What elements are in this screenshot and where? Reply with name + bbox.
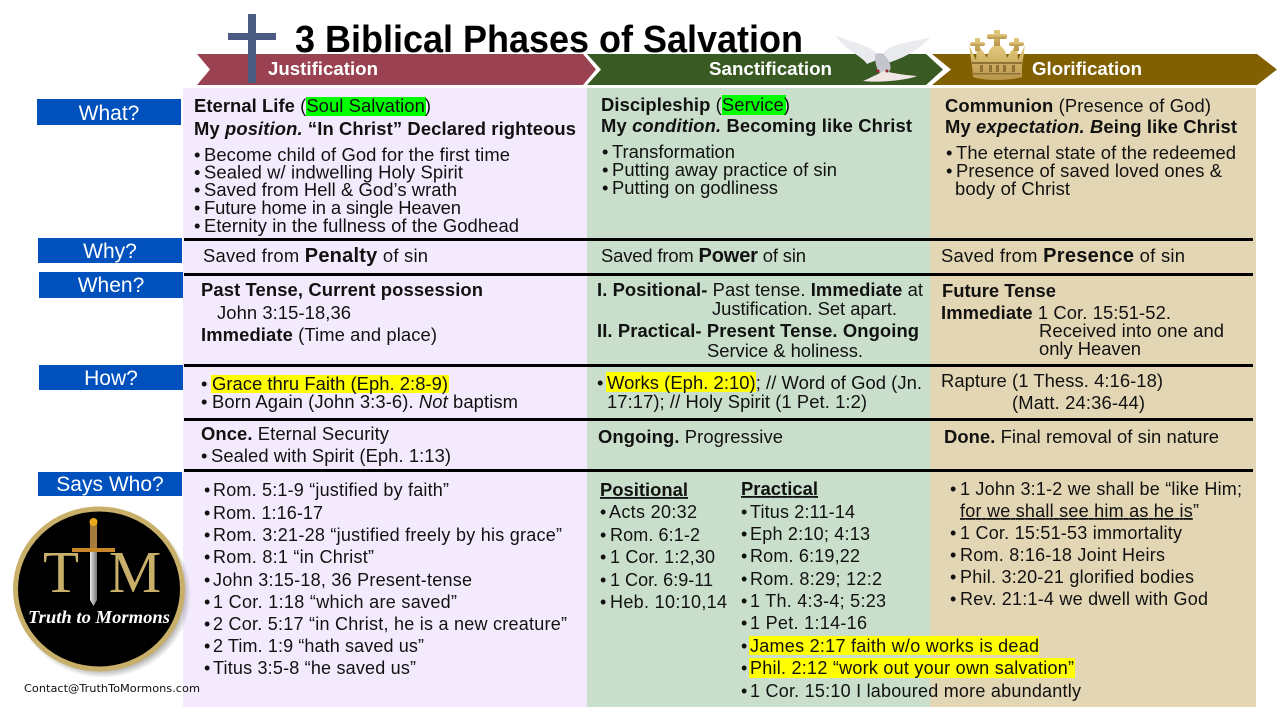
duration: justification: Sealed with Spirit (Eph. 1:13) [211,445,451,466]
when: sanctification [597,279,923,361]
what: justification: • [194,215,200,236]
what: glorification: My expectation. Being like Christ [945,116,1237,137]
how: sanctification [597,372,922,412]
what: sanctification: Discipleship (Service) [601,94,790,115]
row label: How?: How? [84,367,138,390]
phase arrow: Glorification [932,54,1277,85]
says who: practical verses: • [741,613,747,633]
column backgrounds [183,88,1256,707]
says who: justification: • [204,658,210,678]
what: sanctification: My condition. Becoming like Christ [601,115,912,136]
says who: positional verses: 1 Cor. 6:9-11 [610,570,713,590]
how: glorification: Rapture (1 Thess. 4:16-18) [941,370,1163,391]
says who: justification: Rom. 1:16-17 [213,503,323,523]
when: sanctification: Service & holiness. [707,340,863,361]
phase arrow: Sanctification: Sanctification [709,58,832,79]
what: sanctification: Transformation [612,141,735,162]
what: sanctification: Putting away practice of sin [612,159,837,180]
says who: glorification: • [950,567,956,587]
how: sanctification: Works (Eph. 2:10); // Word of God (Jn. [607,372,922,393]
duration: glorification: Done. Final removal of sin nature [944,426,1219,447]
says who: practical verses: • [741,591,747,611]
says who: justification: 2 Tim. 1:9 “hath saved us” [213,636,424,656]
says who: practical verses: • [741,546,747,566]
when: justification: Past Tense, Current possession [201,279,483,300]
why: glorification: Saved from Presence of sin [941,245,1185,267]
row label: What?: What? [79,102,139,125]
when: glorification: Immediate 1 Cor. 15:51-52. [941,302,1171,323]
what: sanctification [601,94,912,198]
says who: positional verses: Heb. 10:10,14 [610,592,727,612]
what: justification: Sealed w/ indwelling Holy Spirit [204,162,463,182]
says who: glorification: Rev. 21:1-4 we dwell with God [960,589,1208,609]
says who: glorification: • [950,479,956,499]
how: justification: Born Again (John 3:3-6). Not baptism [212,391,518,412]
what: sanctification: • [602,177,608,198]
says who: justification: Rom. 5:1-9 “justified by faith” [213,480,449,500]
says who: justification: • [204,503,210,523]
says who: justification: John 3:15-18, 36 Present-tense [213,570,472,590]
logo: Truth to Mormons [15,509,191,678]
what: glorification: • [946,160,952,181]
row label: Why? [38,238,182,263]
says who: positional verses: • [600,592,606,612]
says who: positional verses: Acts 20:32 [609,502,697,522]
says who: positional verses: • [600,570,606,590]
when: glorification: only Heaven [1039,338,1141,359]
what: justification: Become child of God for the first time [204,144,510,165]
says who: practical verses: • [741,502,747,522]
why: justification: Saved from Penalty of sin [203,245,428,267]
what: justification: Future home in a single Heaven [204,197,461,218]
how: justification: • [201,373,207,394]
what: justification: My position. “In Christ” Declared righteous [194,118,576,139]
says who: positional verses: Rom. 6:1-2 [610,525,700,545]
says who: justification: • [204,592,210,612]
what: glorification: The eternal state of the redeemed [956,142,1236,163]
says who: practical verses: 1 Cor. 15:10 I laboured more abundantly [750,681,1081,701]
phase arrow: Glorification: Glorification [1032,58,1142,79]
says who: justification: • [204,525,210,545]
when: glorification: Received into one and [1039,320,1224,341]
says who: glorification: • [950,589,956,609]
says who: positional verses: • [600,547,606,567]
says who: positional verses: • [600,525,606,545]
what: glorification: Presence of saved loved ones & [956,160,1222,181]
row dividers [184,238,1253,472]
says who: justification: Rom. 3:21-28 “justified freely by his grace” [213,525,562,545]
says who: practical verses: Titus 2:11-14 [750,502,855,522]
what: justification: Saved from Hell & God’s wrath [204,179,457,200]
when: justification: John 3:15-18,36 [217,302,351,323]
says who: glorification: 1 John 3:1-2 we shall be “like Him; [960,479,1242,499]
says who: practical verses: • [741,524,747,544]
says who: justification: • [204,547,210,567]
says who: practical verses: • [741,681,747,701]
what: justification: • [194,179,200,200]
how: justification: Grace thru Faith (Eph. 2:8-9) [212,373,448,394]
what: glorification: • [946,142,952,163]
phase arrow: Sanctification [587,54,943,85]
says who: justification: • [204,480,210,500]
what: justification: Eternal Life (Soul Salvation) [194,95,431,116]
says who: justification: Rom. 8:1 “in Christ” [213,547,374,567]
says who: positional verses [600,479,727,612]
says who: positional verses: Positional [600,479,688,500]
icon: crown [969,30,1025,80]
when: sanctification: II. Practical- Present Tense. Ongoing [597,320,919,341]
says who: glorification: 1 Cor. 15:51-53 immortality [960,523,1182,543]
says who: justification: Titus 3:5-8 “he saved us” [213,658,416,678]
when: sanctification: Justification. Set apart. [712,298,897,319]
says who: glorification [950,479,1242,609]
says who: justification: 2 Cor. 5:17 “in Christ, he is a new creature” [213,614,567,634]
what: justification: • [194,162,200,182]
icon: cross [228,14,276,83]
phase arrow: Justification [197,54,596,85]
says who: practical verses: Eph 2:10; 4:13 [750,524,870,544]
says who: practical verses: • [741,636,747,656]
row label: When?: When? [78,274,144,297]
duration: justification [201,423,451,466]
what: justification: Eternity in the fullness of the Godhead [204,215,519,236]
when: sanctification: I. Positional- Past tense. Immediate at [597,279,923,300]
how: glorification [941,370,1163,413]
how: glorification: (Matt. 24:36-44) [1012,392,1145,413]
duration: justification: Once. Eternal Security [201,423,390,444]
duration: sanctification: Ongoing. Progressive [598,426,783,447]
row label: Says Who?: Says Who? [56,473,164,496]
panel: glorification [941,95,1242,609]
when: glorification [941,280,1224,359]
panel: sanctification [597,94,1081,701]
says who: glorification: for we shall see him as he is” [960,501,1199,521]
says who: practical verses [741,478,1081,701]
what: justification [194,95,576,236]
what: sanctification: Putting on godliness [612,177,778,198]
logo: Truth to Mormons: M [109,539,161,605]
what: glorification: body of Christ [955,178,1070,199]
says who: practical verses: 1 Th. 4:3-4; 5:23 [750,591,886,611]
duration: justification: • [201,445,207,466]
says who: glorification: • [950,523,956,543]
why: sanctification: Saved from Power of sin [601,245,806,267]
says who: practical verses: Rom. 6:19,22 [750,546,860,566]
says who: justification: • [204,636,210,656]
what: sanctification: • [602,141,608,162]
says who: justification: • [204,614,210,634]
says who: glorification: Rom. 8:16-18 Joint Heirs [960,545,1165,565]
icon: dove [835,35,930,82]
how: sanctification: 17:17); // Holy Spirit (1 Pet. 1:2) [607,391,867,412]
says who: practical verses: Phil. 2:12 “work out your own salvation” [750,658,1074,678]
when: glorification: Future Tense [942,280,1056,301]
row label: When? [39,272,183,298]
title: 3 Biblical Phases of Salvation [295,19,803,61]
what: glorification: Communion (Presence of God) [945,95,1211,116]
says who: practical verses: James 2:17 faith w/o works is dead [750,636,1039,656]
how: justification: • [201,391,207,412]
phase arrow: Justification: Justification [268,58,378,79]
row label: How? [39,365,183,390]
says who: practical verses: Rom. 8:29; 12:2 [750,569,882,589]
what: sanctification: • [602,159,608,180]
how: justification [201,373,518,412]
panel: justification [194,95,576,678]
how: sanctification: • [597,372,603,393]
says who: practical verses: 1 Pet. 1:14-16 [750,613,867,633]
says who: positional verses: • [600,502,606,522]
logo: Truth to Mormons: T [43,539,79,605]
says who: glorification: Phil. 3:20-21 glorified bodies [960,567,1194,587]
row label: Why?: Why? [83,240,137,263]
what: justification: • [194,197,200,218]
when: justification [201,279,483,345]
what: glorification [945,95,1237,199]
says who: positional verses: 1 Cor. 1:2,30 [610,547,715,567]
says who: justification: • [204,570,210,590]
says who: glorification: • [950,545,956,565]
says who: practical verses: • [741,658,747,678]
says who: practical verses: Practical [741,478,818,499]
says who: justification: 1 Cor. 1:18 “which are saved” [213,592,457,612]
when: justification: Immediate (Time and place) [201,324,437,345]
says who: justification [204,480,567,678]
contact email: Contact@TruthToMormons.com [24,682,200,695]
what: justification: • [194,144,200,165]
logo: Truth to Mormons: Truth to Mormons [28,607,170,627]
row label: What? [37,99,181,125]
says who: practical verses: • [741,569,747,589]
